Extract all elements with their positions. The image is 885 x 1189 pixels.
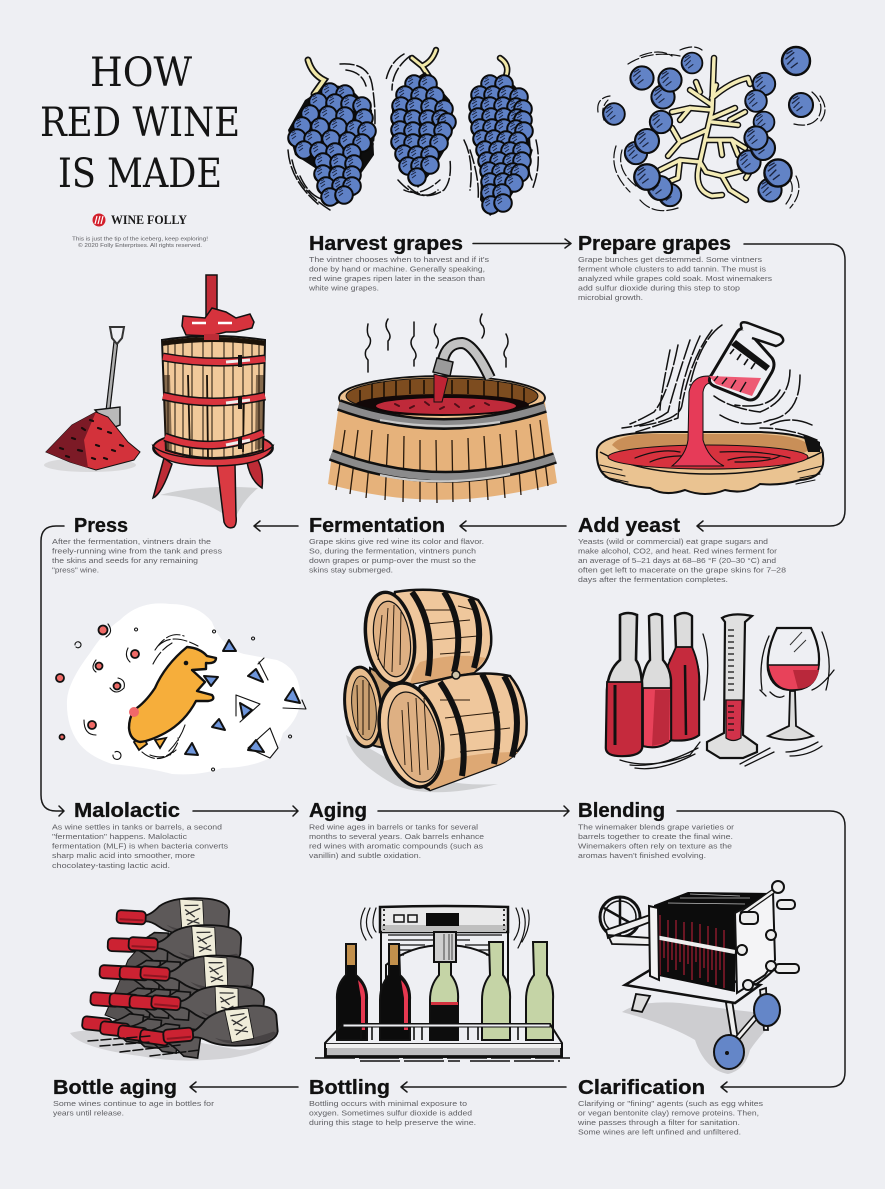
row 4 <box>90 979 265 1027</box>
step: clarification: Clarifying or "fining" agents (such as egg whites <box>578 1099 763 1108</box>
illustration: malolactic bacteria <box>56 603 306 774</box>
flow arrow: blending to clarification <box>677 811 845 1092</box>
step: prepare grapes: Prepare grapes <box>578 233 731 255</box>
title: RED WINE <box>40 100 240 146</box>
illustration: bottling machine <box>315 906 570 1061</box>
handwheel <box>600 897 640 937</box>
row 3 <box>99 950 254 996</box>
illustration: blending bottles, cylinder and glass <box>606 613 834 769</box>
screw and crossbar <box>182 275 254 340</box>
steam <box>365 314 508 372</box>
step: malolactic: sharp malic acid into smoother, more <box>52 851 195 860</box>
step: harvest grapes: Harvest grapes <box>309 233 463 255</box>
cluster 1 <box>288 83 376 206</box>
shadow <box>622 1002 780 1074</box>
credit note: © 2020 Folly Enterprises. All rights reserved. <box>78 242 202 249</box>
step: add yeast <box>578 515 786 584</box>
step: bottle aging <box>53 1077 215 1118</box>
hose and stream <box>433 343 490 402</box>
stem: cluster 1 <box>308 60 324 94</box>
illustration: adding yeast pitcher <box>597 322 823 494</box>
step: malolactic: Malolactic <box>74 800 180 822</box>
step: aging: vanillin) and subtle oxidation. <box>309 851 421 860</box>
step: harvest grapes <box>308 233 489 292</box>
step: bottling: during this stage to help preserve the wine. <box>309 1118 476 1127</box>
top barrel <box>360 589 491 687</box>
step: aging: months to several years. Oak barrels enhance <box>309 832 484 841</box>
step: add yeast: an average of 5–21 days at 68–86 °F (20–30 °C) and <box>578 556 776 565</box>
row 1 <box>116 894 230 938</box>
illustration: fermentation vat <box>328 314 557 503</box>
triangles <box>185 640 300 755</box>
step: add yeast: Yeasts (wild or commercial) eat grape sugars and <box>578 537 768 546</box>
front lower barrel <box>369 671 527 794</box>
step: prepare grapes <box>578 233 772 302</box>
illustration: three grape clusters <box>288 50 538 216</box>
step: press: freely-running wine from the tank and press <box>52 546 222 556</box>
step: aging: red wines with aromatic compounds (such as <box>309 842 483 850</box>
step: blending: The winemaker blends grape varieties or <box>578 822 734 832</box>
control panel <box>380 906 508 932</box>
end plates <box>649 906 659 980</box>
step: harvest grapes: The vintner chooses when to harvest and if it's <box>309 255 489 264</box>
step: bottling <box>309 1077 476 1127</box>
machine columns and arch <box>381 932 508 1010</box>
bottle: empty green 2 <box>526 942 553 1040</box>
step: aging: Aging <box>309 800 367 822</box>
motion lines <box>622 325 817 440</box>
screw frame <box>606 915 650 945</box>
step: add yeast: Add yeast <box>578 515 680 537</box>
step: fermentation: down grapes or pump-over the must so the <box>309 556 476 565</box>
flow arrow: bottling to bottle aging <box>190 1082 298 1092</box>
illustration: filter press <box>600 881 799 1074</box>
pan <box>597 432 823 494</box>
step: bottling: oxygen. Sometimes sulfur dioxide is added <box>309 1108 472 1118</box>
step: bottling: Bottling occurs with minimal exposure to <box>309 1099 467 1108</box>
step: harvest grapes: done by hand or machine. Generally speaking, <box>309 264 485 274</box>
measuring cylinder <box>707 614 757 758</box>
step: malolactic: "fermentation" happens. Malolactic <box>52 832 187 841</box>
bottle: being filled <box>430 962 458 1040</box>
step: press: Press <box>74 515 128 537</box>
step: aging: Red wine ages in barrels or tanks for several <box>309 822 478 832</box>
plate stack <box>654 892 773 992</box>
motion lines on bacterium <box>142 635 198 759</box>
flow arrow: fermentation to press <box>254 521 298 531</box>
legs and wheels <box>632 988 780 1069</box>
bacterium <box>129 647 216 750</box>
credit note: This is just the tip of the iceberg, keep exploring! <box>72 236 208 242</box>
wine glass <box>768 628 819 740</box>
bottle: empty green 1 <box>482 942 510 1040</box>
tank bands <box>163 355 265 449</box>
step: blending: Blending <box>578 800 665 822</box>
row 5 <box>81 1004 279 1058</box>
step: clarification: or vegan bentonite clay) remove proteins. Then, <box>578 1108 759 1118</box>
step: prepare grapes: ferment whole clusters to add tannin. The must is <box>578 264 766 274</box>
bottle: corked red 1 <box>337 944 367 1040</box>
wood tank <box>162 336 265 458</box>
step: bottling: Bottling <box>309 1077 390 1099</box>
lower left barrel <box>341 665 405 749</box>
bottle: corked red 2 <box>380 944 410 1040</box>
illustration: destemmed grapes <box>598 47 825 211</box>
step: press <box>52 515 222 574</box>
flow arrow: add yeast to fermentation <box>460 521 566 531</box>
step: fermentation: skins stay submerged. <box>309 566 393 574</box>
step: clarification: Clarification <box>578 1077 705 1099</box>
white cloud <box>67 603 300 774</box>
step: malolactic <box>52 800 228 870</box>
title: HOW <box>90 50 192 96</box>
shadow <box>346 735 498 792</box>
flow arrow: prepare to add yeast <box>697 244 845 531</box>
step: blending <box>578 800 734 860</box>
step: bottle aging: Bottle aging <box>53 1077 177 1099</box>
step: bottle aging: Some wines continue to age in bottles for <box>53 1099 215 1108</box>
step: add yeast: make alcohol, CO2, and heat. Red wines ferment for <box>578 546 777 556</box>
tray front lip <box>153 446 273 466</box>
step: malolactic: chocolatey-tasting lactic acid. <box>52 861 170 870</box>
step: fermentation: Fermentation <box>309 515 445 537</box>
stack body <box>105 930 260 1045</box>
step: harvest grapes: red wine grapes ripen later in the season than <box>309 274 485 283</box>
cluster 2 <box>391 72 456 188</box>
bottle tray <box>315 1024 570 1061</box>
step: add yeast: often get left to macerate on the grape skins for 7–28 <box>578 566 786 574</box>
vat body <box>328 396 557 500</box>
step: malolactic: As wine settles in tanks or barrels, a second <box>52 822 222 832</box>
stem: cluster 3 <box>500 58 507 80</box>
step: aging <box>309 800 484 860</box>
floor shadow <box>160 487 258 522</box>
loose grapes <box>603 47 813 206</box>
motion lines <box>361 908 529 948</box>
title: IS MADE <box>58 151 222 197</box>
rear legs <box>153 458 262 498</box>
step: bottle aging: years until release. <box>53 1108 124 1118</box>
step: prepare grapes: analyzed while grapes cold soak. Most winemakers <box>578 274 772 283</box>
wine stream <box>672 376 760 466</box>
step: fermentation: So, during the fermentation, vintners punch <box>309 546 476 556</box>
iron bands <box>331 405 555 481</box>
pomace pile <box>44 327 140 472</box>
step: malolactic: fermentation (MLF) is when bacteria converts <box>52 842 228 850</box>
illustration: stacked aging bottles <box>70 894 279 1061</box>
top rim <box>339 376 545 420</box>
bottle 1 <box>606 613 642 756</box>
stem skeleton <box>660 58 752 200</box>
flow arrow: aging to blending <box>378 806 569 816</box>
pitcher <box>709 322 783 400</box>
credit note <box>72 236 208 249</box>
front leg <box>217 464 236 528</box>
red dots <box>56 626 139 740</box>
stem: cluster 2 <box>412 50 436 78</box>
step: blending: barrels together to create the final wine. <box>578 832 733 841</box>
illustration: wine press and shovel <box>44 275 273 528</box>
step: fermentation <box>309 515 484 574</box>
step: add yeast: days after the fermentation completes. <box>578 575 728 584</box>
bottle 3 <box>668 613 699 740</box>
step: clarification <box>577 1077 763 1136</box>
bottle 2 <box>642 614 671 747</box>
illustration: oak barrels <box>341 589 527 794</box>
step: press: After the fermentation, vintners drain the <box>52 537 211 546</box>
shovel <box>95 327 124 428</box>
shelf <box>625 970 760 1003</box>
step: prepare grapes: Grape bunches get destemmed. Some vintners <box>578 255 762 264</box>
shadow <box>70 1029 275 1061</box>
flow arrow: clarification to bottling <box>401 1082 566 1092</box>
row 2 <box>107 921 242 965</box>
step: prepare grapes: add sulfur dioxide during this step to stop <box>578 284 740 292</box>
cluster 3 <box>469 75 533 216</box>
nozzle <box>434 932 456 962</box>
handles and knobs <box>740 881 799 990</box>
step: press: "press" wine. <box>52 566 99 574</box>
base tray <box>153 431 273 465</box>
flow arrow: harvest to prepare <box>473 239 571 248</box>
must in vat <box>355 394 529 416</box>
flow arrow: malolactic to aging <box>193 806 298 816</box>
logo: Wine Folly: WINE FOLLY <box>111 213 187 227</box>
flow arrow: press to malolactic <box>41 526 64 816</box>
step: blending: Winemakers often rely on texture as the <box>578 842 732 850</box>
title <box>40 50 240 197</box>
step: blending: aromas haven't finished evolving. <box>578 851 706 860</box>
step: clarification: Some wines are left unfined and unfiltered. <box>578 1128 741 1136</box>
step: fermentation: Grape skins give red wine its color and flavor. <box>309 537 484 546</box>
step: harvest grapes: white wine grapes. <box>308 284 379 292</box>
step: clarification: wine passes through a filter for sanitation. <box>577 1118 740 1127</box>
step: prepare grapes: microbial growth. <box>578 293 643 302</box>
step: press: the skins and seeds for any remaining <box>52 556 198 565</box>
